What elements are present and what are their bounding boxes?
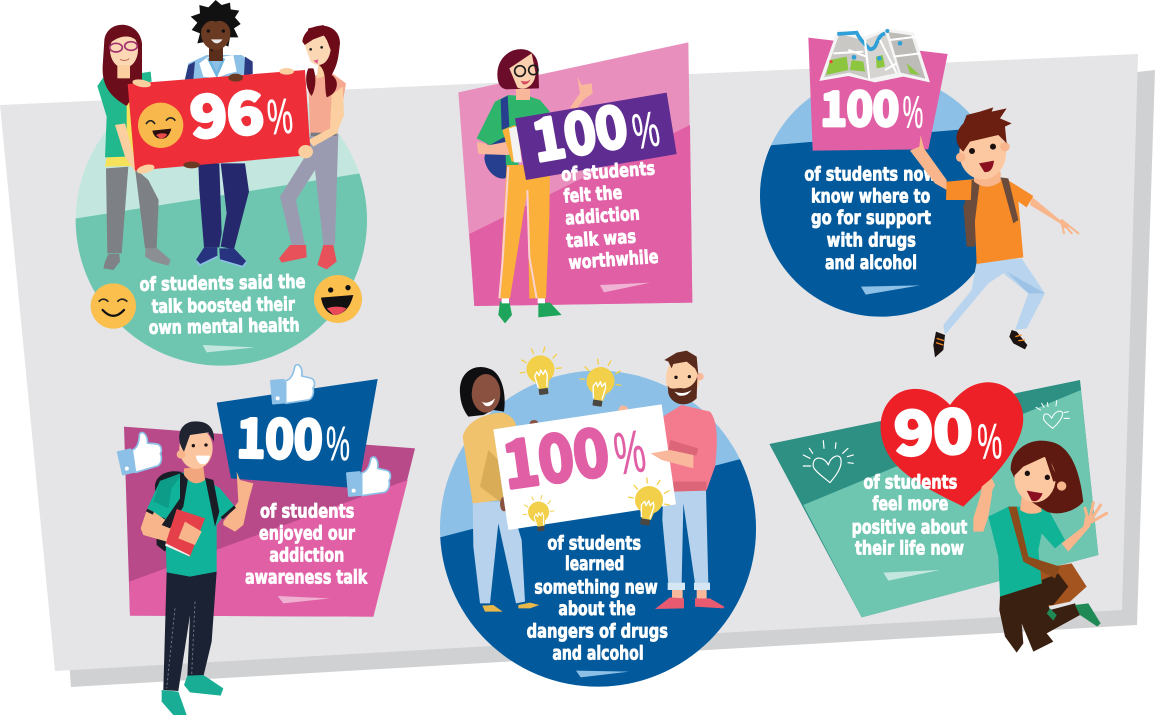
figure: jumping girl bbox=[973, 441, 1107, 653]
figure: bearded man right bbox=[618, 351, 724, 609]
pink sign bbox=[808, 38, 948, 151]
blue sign bbox=[217, 379, 378, 488]
caption: positive about bbox=[852, 517, 967, 538]
purple sign bbox=[515, 79, 677, 180]
caption: dangers of drugs bbox=[527, 621, 668, 642]
caption: feel more bbox=[872, 494, 948, 515]
caption bbox=[245, 502, 368, 588]
percent sign: % bbox=[610, 417, 650, 488]
caption bbox=[852, 472, 967, 559]
red 96% sign bbox=[128, 65, 311, 171]
blue circle bbox=[430, 371, 760, 693]
caption: of students bbox=[547, 533, 641, 554]
caption: worthwhile bbox=[568, 247, 659, 274]
pink panel bbox=[458, 42, 692, 306]
caption: of students bbox=[260, 502, 354, 523]
red heart bbox=[881, 382, 1023, 507]
caption bbox=[527, 533, 668, 664]
icon: outline heart left bbox=[803, 441, 853, 483]
percent sign: % bbox=[628, 101, 664, 160]
emoji: grinning bbox=[138, 103, 183, 148]
panel: 100% know where to go bbox=[750, 28, 1078, 370]
percent sign: % bbox=[976, 413, 1003, 470]
caption: awareness talk bbox=[245, 567, 368, 588]
icon: bulb lower right bbox=[624, 475, 673, 529]
caption bbox=[139, 272, 306, 339]
blue circle bbox=[760, 90, 1001, 317]
teal circle bbox=[76, 79, 367, 366]
figure: girl with thumb up bbox=[477, 49, 593, 323]
percent sign: % bbox=[326, 417, 350, 471]
caption: know where to bbox=[811, 187, 930, 208]
caption: and alcohol bbox=[825, 253, 917, 274]
value 100: 100 bbox=[525, 79, 633, 178]
caption: own mental health bbox=[148, 315, 300, 339]
caption: felt the bbox=[563, 183, 623, 208]
icon: bulb top right bbox=[577, 357, 624, 409]
caption: and alcohol bbox=[552, 643, 644, 664]
percent sign: % bbox=[903, 86, 923, 137]
emoji: left smile bbox=[91, 283, 136, 329]
caption: something new bbox=[534, 577, 658, 598]
tick bbox=[278, 596, 330, 603]
caption: enjoyed our bbox=[259, 523, 356, 544]
magenta panel bbox=[124, 427, 415, 617]
value 96: 96 bbox=[187, 65, 266, 155]
icon: bulb top left bbox=[517, 345, 564, 397]
teal panel bbox=[769, 380, 1098, 617]
value 90: 90 bbox=[893, 383, 974, 473]
raised hand bbox=[980, 478, 995, 498]
panel: 100% learned something new bbox=[430, 345, 760, 693]
caption: of students bbox=[863, 472, 957, 493]
value 100: 100 bbox=[821, 72, 899, 139]
caption: about the bbox=[558, 599, 636, 620]
icon: thumb right bbox=[346, 457, 390, 497]
tick bbox=[203, 345, 255, 352]
hand on sign bbox=[651, 450, 693, 468]
caption: talk boosted their bbox=[151, 294, 296, 318]
caption: of students bbox=[561, 158, 656, 186]
percent sign: % bbox=[265, 88, 295, 146]
panel: 96% talk boosted mental health bbox=[76, 0, 367, 366]
caption: addiction bbox=[269, 546, 344, 567]
tick bbox=[861, 285, 920, 295]
panel: 100% talk was worthwhile bbox=[458, 42, 692, 323]
value 100: 100 bbox=[496, 400, 614, 507]
figure: right girl bbox=[279, 25, 346, 269]
icon: map bbox=[819, 28, 930, 82]
caption: talk was bbox=[566, 226, 637, 252]
caption bbox=[561, 158, 659, 274]
hands on sign bbox=[132, 68, 313, 175]
panel: 90% feel more positive bbox=[769, 380, 1107, 653]
caption: addiction bbox=[565, 203, 640, 230]
panel: 100% enjoyed talk bbox=[115, 365, 415, 715]
tick bbox=[883, 570, 940, 581]
tick bbox=[576, 671, 629, 677]
figure: left girl bbox=[97, 25, 171, 270]
caption: of students said the bbox=[139, 272, 306, 296]
caption: with drugs bbox=[827, 231, 916, 252]
figure: woman left bbox=[460, 367, 539, 612]
icon: bulb lower left bbox=[521, 494, 557, 533]
caption: of students now bbox=[804, 165, 937, 186]
figure: jumping boy bbox=[910, 107, 1078, 357]
emoji: right laugh bbox=[314, 275, 362, 323]
figure: boy with book bbox=[141, 421, 253, 715]
icon: thumb left bbox=[115, 430, 164, 476]
tick bbox=[600, 283, 650, 292]
icon: outline heart right bbox=[1036, 401, 1069, 428]
caption: learned bbox=[565, 554, 624, 575]
caption bbox=[804, 165, 937, 274]
caption: their life now bbox=[855, 538, 964, 559]
caption: go for support bbox=[811, 208, 931, 229]
white sign bbox=[493, 400, 676, 530]
figure: middle boy bbox=[185, 0, 253, 267]
icon: thumb top bbox=[270, 365, 314, 405]
value 100: 100 bbox=[236, 396, 323, 474]
